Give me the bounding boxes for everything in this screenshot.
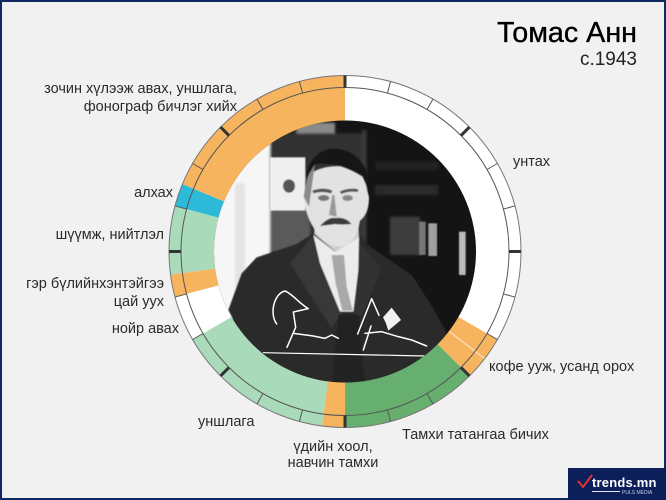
label: lunch, cigar: үдийн хоол, [293, 439, 373, 455]
signature [263, 291, 427, 356]
logo tagline: PULS MEDIA [622, 490, 653, 496]
segment: coffee, dressing [345, 252, 497, 376]
portrait photo [212, 113, 478, 390]
segment: writing with cigar [345, 252, 470, 428]
label: reading: уншлага [198, 414, 255, 430]
brows and eyes [312, 189, 332, 193]
label: guests, reading, recording: фонограф бичлэг хийх [84, 99, 238, 115]
title: Томас Анн [497, 17, 637, 49]
segment: lunch, cigar [322, 252, 345, 428]
hour tick scale [169, 76, 521, 428]
label: walking: алхах [134, 185, 174, 201]
label: family tea: гэр бүлийнхэнтэйгээ [26, 276, 164, 292]
segment: family tea [170, 252, 345, 297]
label: guests, reading, recording [44, 81, 238, 115]
label: lunch, cigar [288, 439, 378, 471]
ring base: sleep [169, 76, 521, 428]
mustache [320, 218, 352, 226]
label: nap: нойр авах [112, 321, 180, 337]
divider inside coffee segment [449, 331, 485, 359]
hair [305, 148, 368, 190]
segment: guests, reading, recording [182, 76, 345, 252]
shirt [313, 235, 359, 312]
segment: reading [193, 252, 345, 426]
logo text: trends.mn [592, 475, 657, 490]
logo: trends.mn [568, 468, 666, 500]
label: coffee, dressing: кофе ууж, усанд орох [489, 359, 635, 375]
daily routine clock ring [169, 76, 521, 428]
label: guests, reading, recording: зочин хүлээж авах, уншлага, [44, 81, 237, 97]
label: writing with cigar: Тамхи татангаа бичих [402, 427, 550, 443]
label: lunch, cigar: навчин тамхи [288, 455, 378, 471]
year: с.1943 [580, 49, 637, 70]
label: sleep: унтах [513, 154, 551, 170]
nose [329, 195, 337, 217]
logo underline [592, 491, 620, 492]
jacket [228, 233, 447, 390]
neck and face [314, 227, 360, 252]
segment: walking [175, 184, 345, 252]
icon: check mark [578, 475, 592, 487]
label: reviews, publishing: шүүмж, нийтлэл [56, 227, 164, 243]
handkerchief [383, 308, 401, 331]
segment: reviews, publishing [169, 206, 345, 274]
title block [497, 17, 637, 70]
activity labels [26, 81, 635, 471]
label: family tea [26, 276, 165, 310]
label: family tea: цай уух [114, 294, 165, 310]
